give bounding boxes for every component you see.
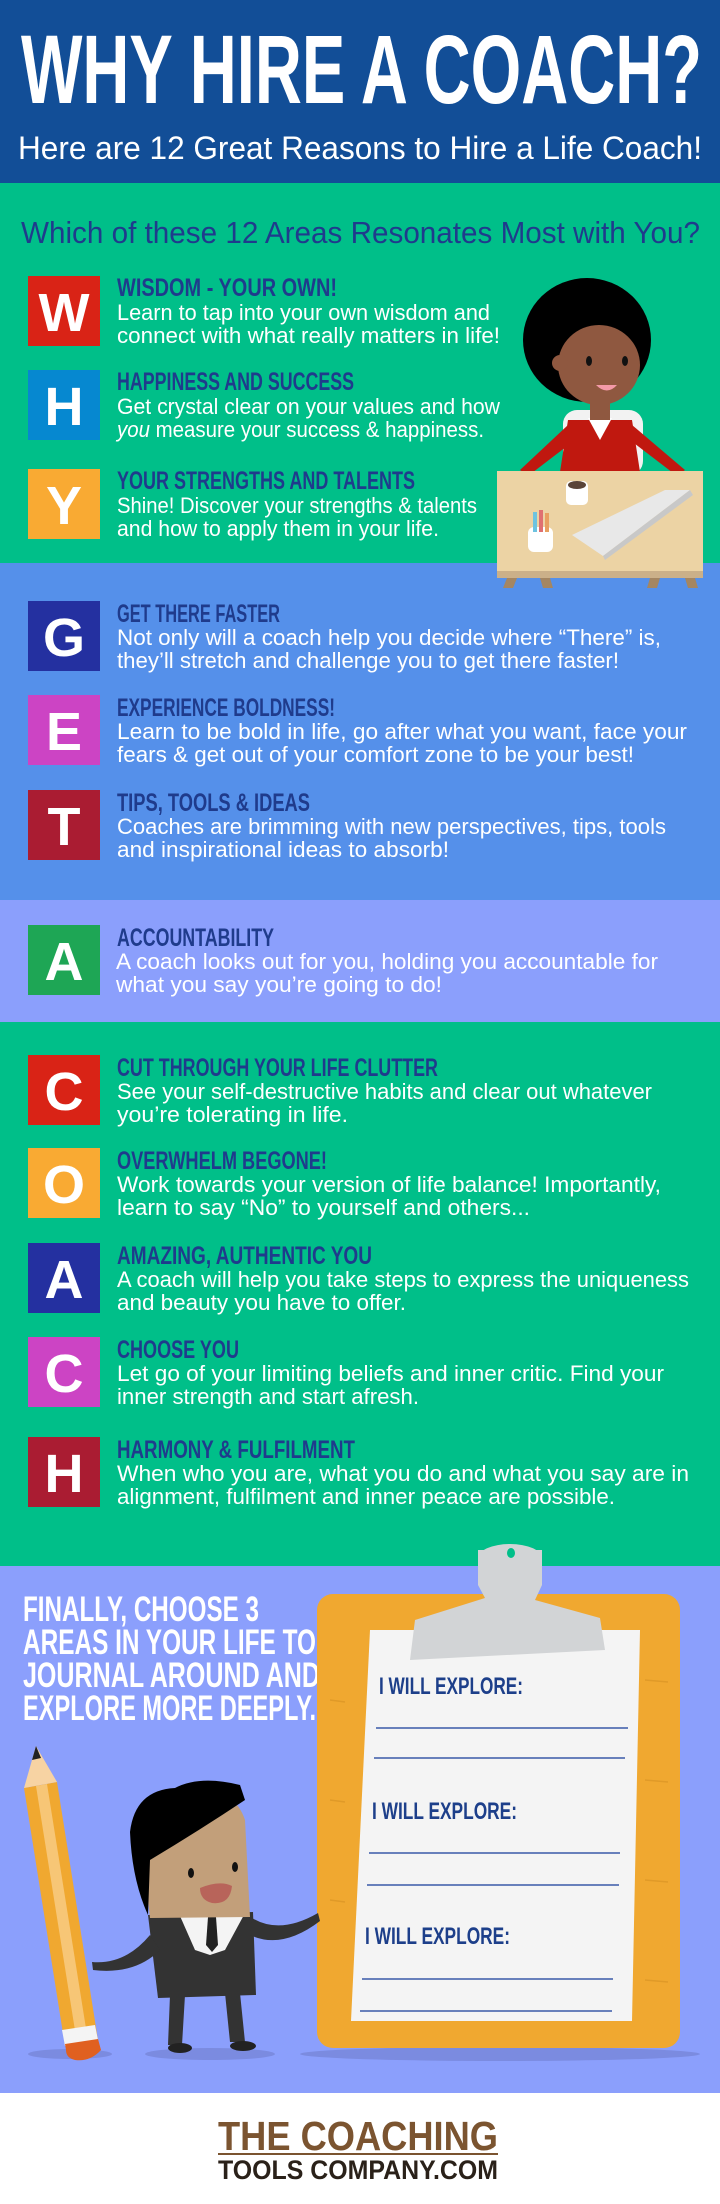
- item H harmony: H: [44, 1444, 84, 1504]
- item A accountability: A: [44, 932, 84, 992]
- item H harmony: HARMONY & FULFILMENT: [117, 1436, 355, 1464]
- item E: [28, 694, 687, 767]
- final instruction text: [23, 1590, 320, 1728]
- item W: [28, 274, 500, 348]
- businessman: [92, 1781, 320, 2053]
- item E: EXPERIENCE BOLDNESS!: [117, 694, 335, 722]
- illustration: woman at desk: [497, 278, 703, 588]
- item C choose: inner strength and start afresh.: [117, 1384, 419, 1409]
- final instruction text: JOURNAL AROUND AND: [23, 1656, 320, 1695]
- item A authentic: [28, 1242, 689, 1315]
- item A accountability: ACCOUNTABILITY: [117, 924, 274, 952]
- section heading: Which of these 12 Areas Resonates Most with You?: [21, 215, 700, 250]
- item G: [28, 600, 661, 673]
- item A authentic: and beauty you have to offer.: [117, 1290, 406, 1315]
- subtitle: Here are 12 Great Reasons to Hire a Life Coach!: [18, 130, 702, 166]
- exploration lines: [360, 1673, 628, 2011]
- pencil: [24, 1746, 101, 2060]
- logo: THE COACHING: [218, 2113, 498, 2159]
- item C clutter: [28, 1054, 652, 1127]
- item T: [28, 789, 666, 862]
- item O: OVERWHELM BEGONE!: [117, 1147, 327, 1175]
- item C clutter: you’re tolerating in life.: [117, 1102, 348, 1127]
- item E: fears & get out of your comfort zone to be your best!: [117, 742, 634, 767]
- item O: [28, 1147, 661, 1220]
- item C choose: C: [44, 1344, 84, 1404]
- exploration lines: I WILL EXPLORE:: [379, 1673, 523, 1700]
- clip: [410, 1544, 605, 1660]
- item T: Coaches are brimming with new perspectives, tips, tools: [117, 814, 666, 839]
- item Y: YOUR STRENGTHS AND TALENTS: [117, 467, 415, 495]
- item W: connect with what really matters in life!: [117, 323, 500, 348]
- item A authentic: AMAZING, AUTHENTIC YOU: [117, 1242, 372, 1270]
- exploration lines: I WILL EXPLORE:: [365, 1923, 510, 1950]
- final instruction text: FINALLY, CHOOSE 3: [23, 1590, 259, 1629]
- item E: Learn to be bold in life, go after what you want, face your: [117, 719, 687, 744]
- item A authentic: A: [44, 1250, 84, 1310]
- item T: and inspirational ideas to absorb!: [117, 837, 449, 862]
- item C choose: [28, 1336, 664, 1409]
- item O: Work towards your version of life balance! Importantly,: [117, 1172, 661, 1197]
- exploration lines: I WILL EXPLORE:: [372, 1798, 517, 1825]
- item H: HAPPINESS AND SUCCESS: [117, 368, 354, 396]
- item C clutter: See your self-destructive habits and clear out whatever: [117, 1079, 652, 1104]
- item A accountability: A coach looks out for you, holding you accountable for: [116, 949, 658, 974]
- item O: O: [43, 1155, 85, 1215]
- item H: you measure your success & happiness.: [115, 417, 484, 442]
- item Y: and how to apply them in your life.: [117, 516, 439, 541]
- item H: Get crystal clear on your values and how: [117, 394, 500, 419]
- item A authentic: A coach will help you take steps to express the uniqueness: [117, 1267, 689, 1292]
- item G: they’ll stretch and challenge you to get there faster!: [117, 648, 619, 673]
- item E: E: [46, 702, 82, 762]
- item Y: Shine! Discover your strengths & talents: [117, 493, 477, 518]
- clipboard: [317, 1544, 680, 2048]
- item G: GET THERE FASTER: [117, 600, 280, 628]
- item C choose: CHOOSE YOU: [117, 1336, 239, 1364]
- item C clutter: C: [44, 1062, 84, 1122]
- item W: WISDOM - YOUR OWN!: [117, 274, 337, 302]
- item T: TIPS, TOOLS & IDEAS: [117, 789, 310, 817]
- final instruction text: AREAS IN YOUR LIFE TO: [23, 1623, 316, 1662]
- item W: Learn to tap into your own wisdom and: [117, 300, 490, 325]
- logo: [218, 2113, 498, 2185]
- item H harmony: [28, 1436, 689, 1509]
- item H: [28, 368, 500, 442]
- item Y: Y: [46, 476, 82, 536]
- shadows: [28, 2047, 700, 2061]
- item T: T: [48, 797, 80, 857]
- item A accountability: what you say you’re going to do!: [115, 972, 442, 997]
- item C choose: Let go of your limiting beliefs and inner critic. Find your: [117, 1361, 664, 1386]
- final instruction text: EXPLORE MORE DEEPLY.: [23, 1689, 316, 1728]
- item C clutter: CUT THROUGH YOUR LIFE CLUTTER: [117, 1054, 438, 1082]
- item O: learn to say “No” to yourself and others...: [117, 1195, 530, 1220]
- item W: W: [39, 283, 90, 343]
- item G: Not only will a coach help you decide where “There” is,: [117, 625, 661, 650]
- item H harmony: alignment, fulfilment and inner peace are possible.: [117, 1484, 615, 1509]
- item H harmony: When who you are, what you do and what you say are in: [117, 1461, 689, 1486]
- item H: H: [44, 377, 84, 437]
- item G: G: [43, 608, 85, 668]
- item Y: [28, 467, 477, 541]
- logo: TOOLS COMPANY.COM: [218, 2155, 498, 2185]
- item A accountability: [28, 924, 658, 997]
